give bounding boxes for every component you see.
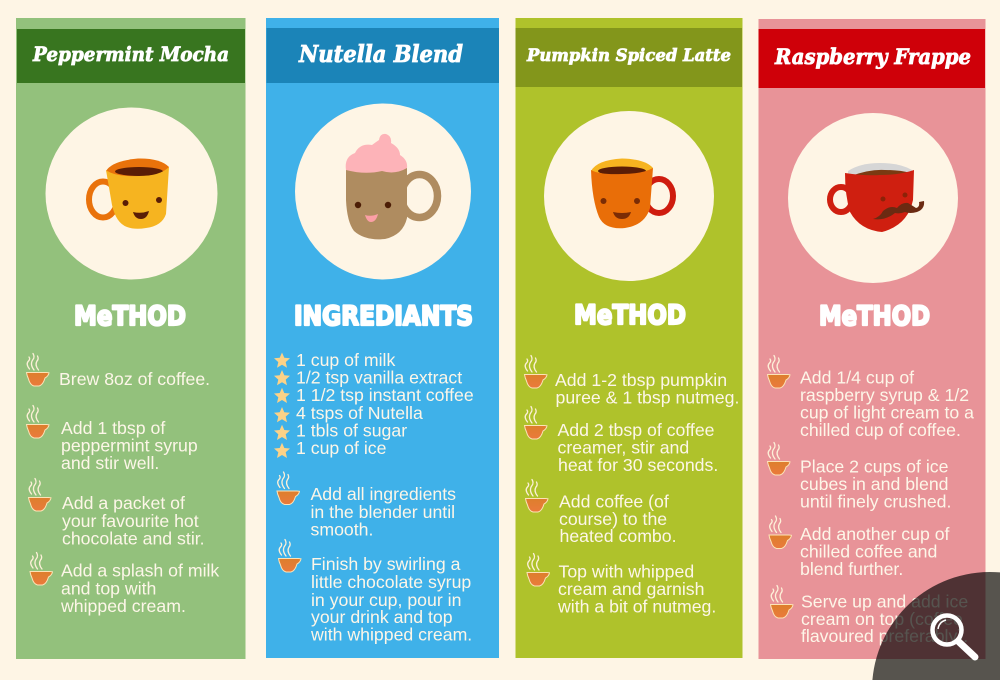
step 1: Add all ingredients bbox=[310, 484, 456, 504]
panel 4 title: Raspberry Frappe bbox=[774, 44, 971, 69]
step 4 bbox=[30, 552, 219, 616]
panel 4 circle bbox=[788, 113, 958, 283]
step 1: Add 1-2 tbsp pumpkin bbox=[555, 370, 727, 390]
step 2: little chocolate syrup bbox=[311, 572, 471, 592]
step 3 bbox=[526, 480, 677, 546]
step 4: cream on top (coffee bbox=[801, 609, 963, 629]
step 1: in the blender until bbox=[310, 502, 455, 522]
zoom overlay corner bbox=[872, 572, 1000, 680]
step 3: blend further. bbox=[800, 559, 903, 579]
step 2: Finish by swirling a bbox=[311, 554, 461, 574]
step 2: in your cup, pour in bbox=[311, 590, 461, 610]
panel 3 heading: MeTHOD bbox=[574, 300, 686, 331]
step 2: Add 2 tbsp of coffee bbox=[558, 420, 715, 440]
panel 1 header band bbox=[17, 29, 245, 83]
panel 2 header band bbox=[266, 28, 499, 83]
step 2: peppermint syrup bbox=[61, 436, 198, 456]
step 3 bbox=[28, 478, 205, 548]
icon: red mug with moustache bbox=[830, 163, 924, 232]
step 4: with a bit of nutmeg. bbox=[557, 597, 716, 617]
step 2: creamer, stir and bbox=[558, 438, 689, 458]
step 1: Brew 8oz of coffee. bbox=[59, 369, 210, 389]
panel 3 background bbox=[516, 18, 742, 658]
step 4: cream and garnish bbox=[558, 579, 704, 599]
panel 1 title: Peppermint Mocha bbox=[32, 42, 229, 66]
step 4: and top with bbox=[61, 578, 156, 598]
step 3: Add another cup of bbox=[800, 524, 950, 544]
step 2: Add 1 tbsp of bbox=[61, 418, 165, 438]
ingredient: milk: 1 cup of milk bbox=[296, 350, 395, 370]
panel 1 heading: MeTHOD bbox=[74, 301, 186, 332]
ingredient: instant coffee: 1 1/2 tsp instant coffee bbox=[296, 385, 474, 405]
panel 3 header band bbox=[516, 28, 742, 87]
step 2 bbox=[26, 406, 198, 473]
step 4: Add a splash of milk bbox=[61, 561, 219, 581]
panel 1 circle bbox=[46, 108, 218, 280]
step 4: flavoured preferably). bbox=[801, 626, 968, 646]
panel 2 circle bbox=[295, 104, 471, 280]
step 3: chocolate and stir. bbox=[62, 528, 205, 548]
step 2: cubes in and blend bbox=[800, 474, 948, 494]
step 1 bbox=[768, 356, 974, 440]
step 3: course) to the bbox=[559, 509, 667, 529]
step 1: chilled cup of coffee. bbox=[800, 420, 961, 440]
step 3 bbox=[769, 516, 950, 579]
ingredient: Nutella: 4 tsps of Nutella bbox=[296, 403, 423, 423]
step 1: smooth. bbox=[310, 520, 373, 540]
step 3: Add coffee (of bbox=[559, 492, 669, 512]
panel 4 background bbox=[758, 19, 986, 659]
panel: Raspberry Frappe bbox=[758, 19, 986, 659]
panel 4 heading: MeTHOD bbox=[819, 301, 930, 332]
icon: yellow smiling mug bbox=[89, 158, 169, 229]
step 1: raspberry syrup & 1/2 bbox=[800, 385, 969, 405]
step 2: until finely crushed. bbox=[800, 491, 951, 511]
step 3: your favourite hot bbox=[62, 511, 199, 531]
step 2 bbox=[524, 406, 718, 475]
panel 2 heading: INGREDIANTS bbox=[294, 301, 473, 332]
step 2 bbox=[768, 442, 951, 511]
panel 3 circle bbox=[544, 111, 714, 281]
step 1: cup of light cream to a bbox=[800, 403, 974, 423]
step 1 bbox=[277, 472, 456, 540]
step 1: puree & 1 tbsp nutmeg. bbox=[556, 388, 739, 408]
step 1: Add 1/4 cup of bbox=[800, 368, 914, 388]
step 4: Serve up and add ice bbox=[801, 592, 968, 612]
ingredient: vanilla: 1/2 tsp vanilla extract bbox=[296, 368, 462, 388]
step 4 bbox=[527, 554, 716, 617]
ingredients list bbox=[274, 350, 474, 458]
step 4 bbox=[770, 586, 968, 646]
panel: Peppermint Mocha bbox=[16, 18, 246, 659]
step 2: and stir well. bbox=[61, 453, 159, 473]
icon: orange smiling mug bbox=[591, 158, 673, 228]
panel: Nutella Blend bbox=[266, 18, 499, 658]
step 1 bbox=[524, 356, 739, 408]
step 2: with whipped cream. bbox=[310, 624, 472, 644]
panel 1 background bbox=[16, 18, 246, 659]
icon: magnifying glass bbox=[932, 616, 975, 657]
step 3: heated combo. bbox=[560, 526, 677, 546]
step 2: Place 2 cups of ice bbox=[800, 457, 949, 477]
step 1 bbox=[26, 354, 210, 389]
step 4: Top with whipped bbox=[558, 562, 694, 582]
panel 3 title: Pumpkin Spiced Latte bbox=[526, 46, 731, 66]
step 2: your drink and top bbox=[311, 607, 453, 627]
panel 2 background bbox=[266, 18, 499, 658]
ingredient: ice: 1 cup of ice bbox=[296, 438, 387, 458]
step 2: heat for 30 seconds. bbox=[558, 455, 718, 475]
panel 2 title: Nutella Blend bbox=[298, 41, 463, 68]
step 2 bbox=[278, 540, 472, 644]
ingredient: sugar: 1 tbls of sugar bbox=[296, 420, 407, 440]
panel: Pumpkin Spiced Latte bbox=[516, 18, 742, 658]
step 4: whipped cream. bbox=[60, 596, 186, 616]
panel 4 header band bbox=[758, 29, 985, 88]
step 3: chilled coffee and bbox=[800, 542, 937, 562]
icon: brown mug with pink whipped cream bbox=[346, 134, 438, 239]
step 3: Add a packet of bbox=[62, 493, 185, 513]
